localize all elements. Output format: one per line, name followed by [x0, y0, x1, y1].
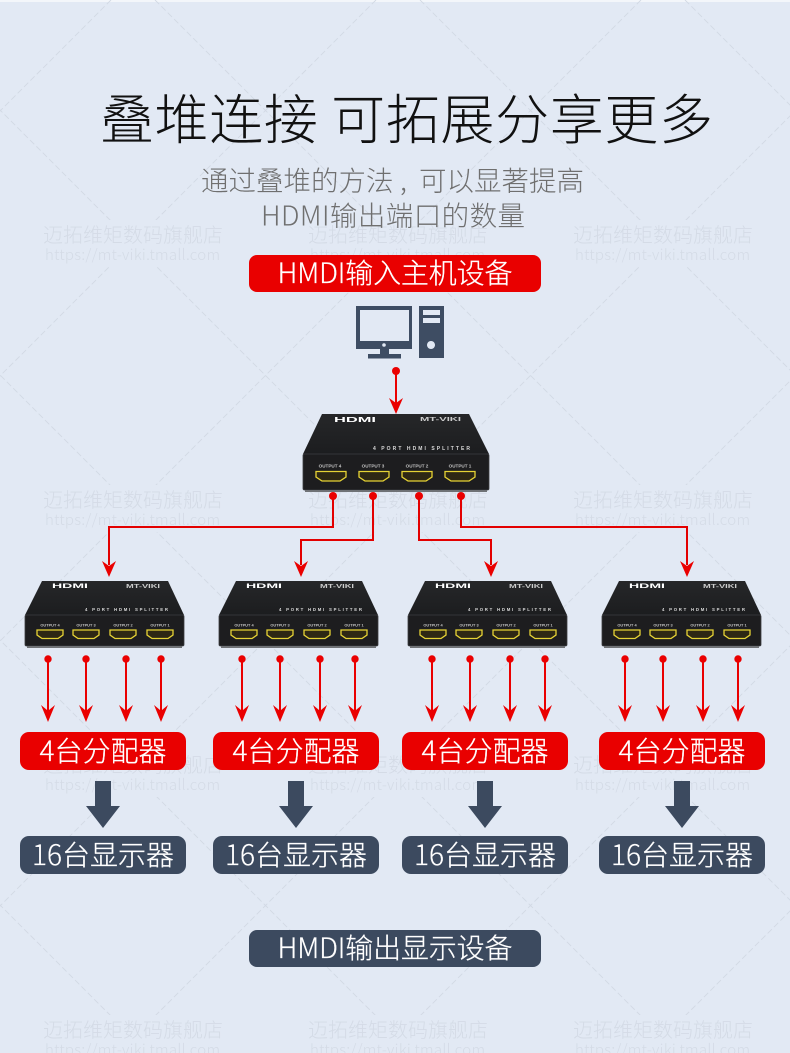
subtitle: HDMI输出端口的数量 — [261, 194, 525, 234]
subtitle: , — [400, 158, 407, 198]
dark labels: 16 displays: 16台显示器 — [611, 834, 753, 874]
output device label: HMDI输出显示设备 — [278, 927, 512, 967]
arrow: computer to main splitter — [389, 367, 403, 414]
splitter 4: OUTPUT 4 — [617, 622, 637, 628]
main splitter: OUTPUT 1 — [449, 464, 472, 468]
splitter 1: MT-VIKI — [126, 584, 161, 590]
subtitle — [201, 158, 584, 234]
block arrows — [86, 781, 699, 828]
splitter 2: OUTPUT 2 — [307, 622, 327, 628]
dark labels: 16 displays — [20, 834, 765, 874]
main splitter: HDMI — [334, 417, 376, 424]
splitter 4: 4 PORT HDMI SPLITTER — [662, 607, 746, 612]
dark labels: 16 displays: 16台显示器 — [32, 834, 174, 874]
red labels: 4 splitters: 4台分配器 — [232, 730, 360, 770]
connectors: main splitter to second-level splitters — [102, 492, 694, 577]
watermarks: 迈拓维矩数码旗舰店 — [43, 484, 223, 513]
main splitter: 4 PORT HDMI SPLITTER — [373, 446, 470, 452]
watermarks — [43, 219, 753, 1053]
input device label: HMDI输入主机设备 — [278, 252, 512, 292]
splitter 1: HDMI — [52, 584, 89, 590]
splitter 2 — [219, 581, 378, 648]
subtitle: 可以显著提高 — [419, 158, 584, 198]
watermarks: https://mt-viki.tmall.com — [310, 774, 485, 795]
watermarks: 迈拓维矩数码旗舰店 — [308, 484, 488, 513]
splitter 3: MT-VIKI — [509, 584, 544, 590]
watermarks: 迈拓维矩数码旗舰店 — [573, 749, 753, 778]
watermarks: https://mt-viki.tmall.com — [45, 244, 220, 265]
splitter 2: OUTPUT 3 — [270, 622, 290, 628]
splitter 1: OUTPUT 4 — [40, 622, 60, 628]
splitter 3: OUTPUT 2 — [496, 622, 516, 628]
watermarks: 迈拓维矩数码旗舰店 — [43, 1014, 223, 1043]
splitter 3: OUTPUT 3 — [459, 622, 479, 628]
dark labels: 16 displays: 16台显示器 — [225, 834, 367, 874]
watermarks: 迈拓维矩数码旗舰店 — [43, 219, 223, 248]
red labels: 4 splitters: 4台分配器 — [618, 730, 746, 770]
watermarks: 迈拓维矩数码旗舰店 — [43, 749, 223, 778]
red labels: 4 splitters: 4台分配器 — [422, 730, 548, 770]
splitter 1 — [25, 581, 184, 648]
main splitter — [303, 414, 489, 492]
title: 叠堆连接 可拓展分享更多 — [100, 76, 713, 155]
red labels: 4 splitters: 4台分配器 — [40, 730, 166, 770]
splitter 2: 4 PORT HDMI SPLITTER — [279, 607, 363, 612]
main splitter: MT-VIKI — [420, 417, 462, 423]
splitter 3: OUTPUT 1 — [533, 622, 553, 628]
subtitle: 通过叠堆的方法 — [201, 158, 394, 198]
splitter 4: MT-VIKI — [703, 584, 738, 590]
icon: computer — [356, 306, 444, 358]
main splitter: OUTPUT 4 — [319, 464, 342, 468]
splitter 2: OUTPUT 4 — [234, 622, 254, 628]
splitter 4: HDMI — [629, 584, 666, 590]
splitter 4 — [602, 581, 761, 648]
splitter 1: OUTPUT 3 — [76, 622, 96, 628]
splitter 1: OUTPUT 2 — [113, 622, 133, 628]
watermarks: 迈拓维矩数码旗舰店 — [573, 1014, 753, 1043]
watermarks: 迈拓维矩数码旗舰店 — [308, 219, 488, 248]
splitter 2: HDMI — [246, 584, 283, 590]
main splitter: OUTPUT 3 — [362, 464, 385, 468]
watermarks: 迈拓维矩数码旗舰店 — [573, 219, 753, 248]
watermarks: https://mt-viki.tmall.com — [575, 509, 750, 530]
watermarks: https://mt-viki.tmall.com — [575, 244, 750, 265]
watermarks: https://mt-viki.tmall.com — [310, 244, 485, 265]
watermarks: https://mt-viki.tmall.com — [310, 509, 485, 530]
red labels: 4 splitters — [20, 730, 765, 770]
watermarks: https://mt-viki.tmall.com — [45, 509, 220, 530]
watermarks: 迈拓维矩数码旗舰店 — [308, 1014, 488, 1043]
splitter 4: OUTPUT 2 — [690, 622, 710, 628]
main splitter: OUTPUT 2 — [406, 464, 429, 468]
splitter 3: 4 PORT HDMI SPLITTER — [468, 607, 552, 612]
watermarks: 迈拓维矩数码旗舰店 — [573, 484, 753, 513]
splitter 1: OUTPUT 1 — [150, 622, 170, 628]
output arrows — [41, 655, 745, 722]
splitter 2: MT-VIKI — [320, 584, 355, 590]
splitter 4: OUTPUT 3 — [653, 622, 673, 628]
splitter 1: 4 PORT HDMI SPLITTER — [85, 607, 169, 612]
splitter 4: OUTPUT 1 — [727, 622, 747, 628]
watermarks: 迈拓维矩数码旗舰店 — [308, 749, 488, 778]
splitter 3: HDMI — [435, 584, 472, 590]
dark labels: 16 displays: 16台显示器 — [414, 834, 556, 874]
watermarks: https://mt-viki.tmall.com — [575, 774, 750, 795]
watermarks: https://mt-viki.tmall.com — [45, 774, 220, 795]
splitter 3 — [408, 581, 567, 648]
splitter 3: OUTPUT 4 — [423, 622, 443, 628]
splitter 2: OUTPUT 1 — [344, 622, 364, 628]
